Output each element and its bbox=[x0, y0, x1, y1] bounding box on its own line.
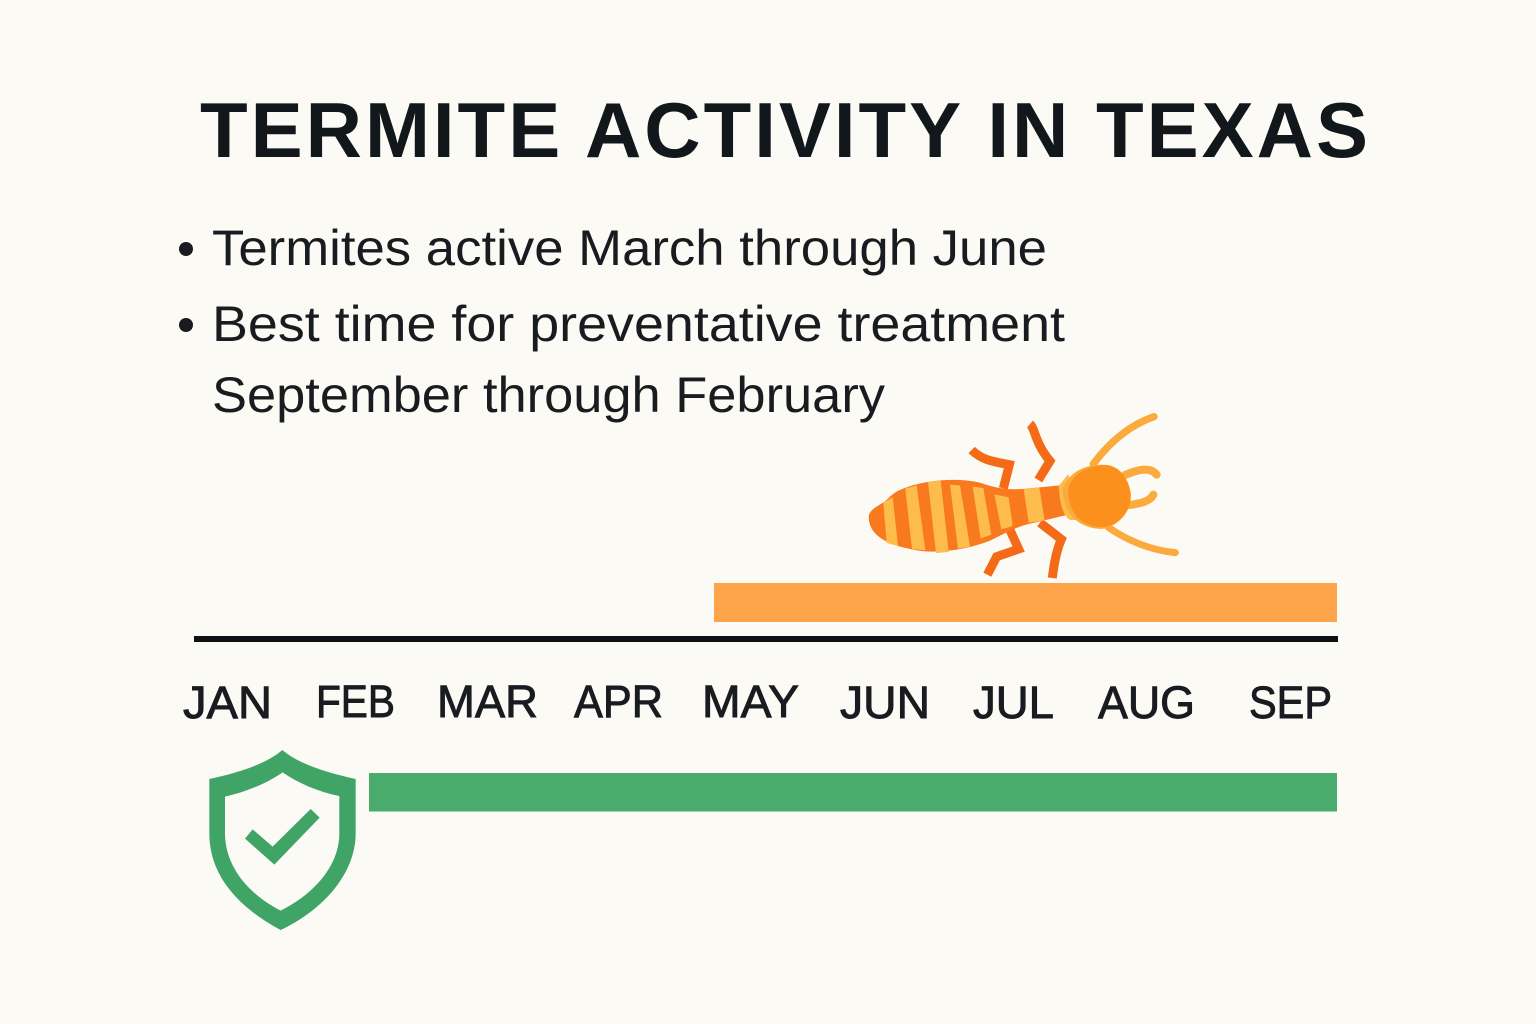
month labels: JAN bbox=[183, 677, 272, 728]
antennae and front palps bbox=[1093, 417, 1175, 553]
bullet: treatment period: September through February bbox=[212, 367, 885, 423]
bullet: active period: Termites active March through June bbox=[212, 220, 1047, 276]
month labels: MAY bbox=[702, 676, 799, 727]
check mark bbox=[245, 809, 320, 865]
title: TERMITE ACTIVITY IN TEXAS bbox=[200, 86, 1368, 174]
month labels bbox=[183, 676, 1332, 728]
stripes bbox=[883, 474, 1080, 553]
legs bbox=[972, 424, 1061, 578]
bullet list bbox=[179, 220, 1065, 423]
month labels: SEP bbox=[1249, 677, 1332, 728]
icon: termite bbox=[869, 417, 1175, 578]
head bbox=[1063, 465, 1131, 529]
month labels: APR bbox=[574, 676, 663, 727]
month labels: JUN bbox=[840, 677, 930, 728]
bar: preventative treatment bbox=[369, 773, 1337, 812]
bullet: treatment period bbox=[179, 296, 1065, 423]
bullet: treatment period: Best time for preventative treatment bbox=[212, 296, 1065, 352]
month labels: AUG bbox=[1098, 677, 1195, 728]
month labels: JUL bbox=[973, 677, 1054, 728]
month labels: FEB bbox=[316, 676, 395, 727]
abdomen and thorax bbox=[869, 480, 1067, 552]
month labels: MAR bbox=[437, 676, 538, 727]
bar: termite activity bbox=[714, 583, 1337, 622]
icon: shield with check bbox=[209, 750, 356, 930]
shield outline bbox=[209, 750, 356, 930]
timeline axis bbox=[194, 636, 1338, 642]
